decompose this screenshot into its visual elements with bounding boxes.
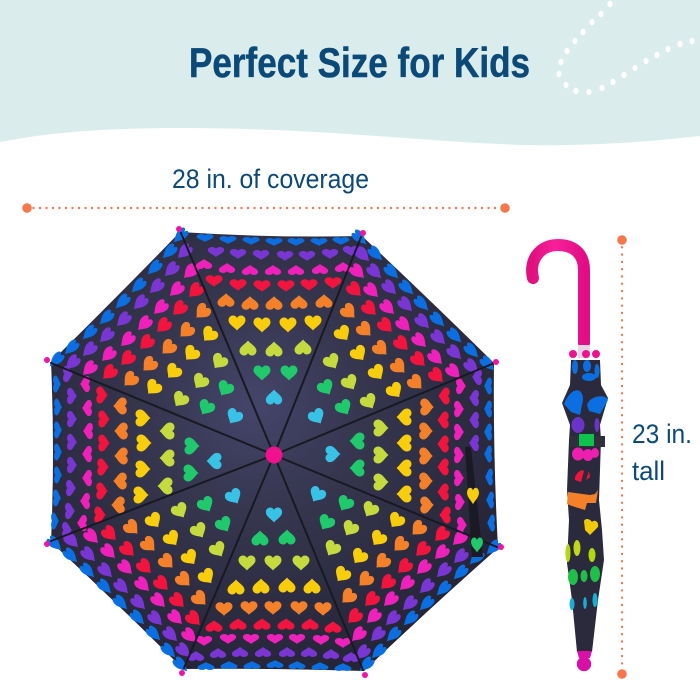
hearts: top-left panel <box>46 226 245 428</box>
open umbrella, top view <box>44 226 504 678</box>
ribs <box>51 233 497 670</box>
tie strap <box>570 434 605 447</box>
hearts: top-right panel <box>306 228 498 428</box>
hearts: left panel <box>51 366 221 538</box>
height label <box>632 419 692 486</box>
folded fabric <box>562 360 608 652</box>
centre knob <box>266 446 282 464</box>
folded rib tips <box>569 350 600 358</box>
title: Perfect Size for Kids <box>189 39 530 86</box>
height label: 23 in. <box>632 419 692 449</box>
decorative dotted swirl <box>556 1 695 95</box>
hearts: bottom-left panel <box>45 486 245 675</box>
canopy fabric <box>51 232 498 671</box>
handle <box>532 245 584 343</box>
height dimension line <box>617 235 627 679</box>
collar <box>578 345 590 358</box>
width dimension line <box>22 203 510 213</box>
closure strap <box>465 447 483 557</box>
hearts: top panel <box>196 234 359 404</box>
closed umbrella, side view <box>532 245 608 671</box>
hearts: bottom-right panel <box>306 484 503 675</box>
hearts: right panel <box>326 369 495 533</box>
ferrule tip <box>577 651 592 671</box>
rib tip caps <box>44 226 504 678</box>
width label: 28 in. of coverage <box>172 164 369 194</box>
height label: tall <box>632 456 665 486</box>
header wave banner <box>0 0 700 145</box>
folded hearts <box>564 360 608 610</box>
hearts: bottom panel <box>188 508 359 671</box>
